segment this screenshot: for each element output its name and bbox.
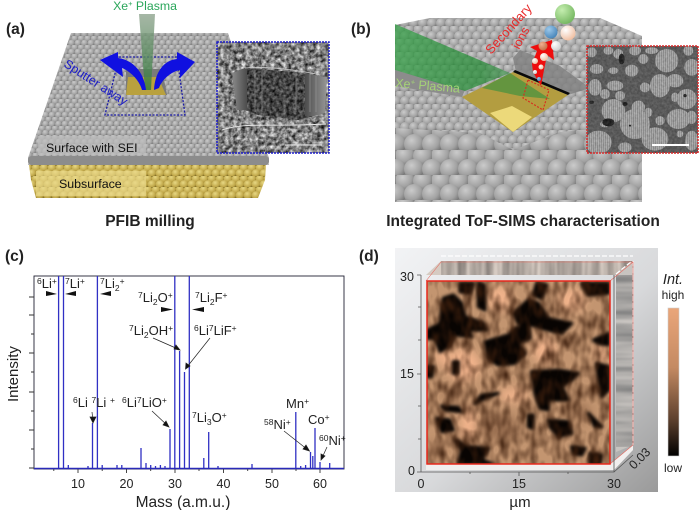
- panel b: ToF-SIMS: [351, 0, 699, 230]
- peak labels: 3: [207, 417, 212, 427]
- y labels d: 0: [408, 464, 415, 478]
- label a: (a): [6, 21, 25, 38]
- ion spheres: [532, 4, 576, 81]
- milled pit: [462, 50, 590, 132]
- surface label: Surface with SEI: [46, 141, 138, 155]
- spectrum peaks: [59, 276, 330, 468]
- mid surface: [395, 18, 642, 160]
- intensity legend: high: [662, 288, 684, 302]
- surface slab: [28, 33, 269, 165]
- peak labels: 7: [65, 276, 70, 286]
- red frame: [427, 281, 610, 464]
- x labels d: 15: [512, 477, 526, 491]
- panel d: ion map: [359, 248, 684, 510]
- black pointer triangles: [46, 291, 204, 312]
- beam on pit floor: [482, 73, 550, 99]
- peak labels: Li: [199, 323, 209, 338]
- peak labels: 2: [144, 330, 149, 340]
- milled crater: [126, 69, 167, 95]
- peak labels: +: [325, 412, 330, 422]
- peak labels: +: [120, 276, 125, 286]
- plasma label b: +: [410, 77, 416, 87]
- peak labels: Li: [200, 290, 210, 305]
- peak labels: Li: [105, 276, 115, 291]
- peak labels: 6: [122, 395, 127, 405]
- blue arrow left: [100, 52, 146, 90]
- x tick labels: 30: [168, 477, 182, 491]
- x labels d: 30: [607, 477, 621, 491]
- peak labels: OH: [149, 323, 168, 338]
- peak labels: 7: [129, 323, 134, 333]
- annotation arrows: [90, 338, 327, 460]
- peak labels: Li: [134, 323, 144, 338]
- y labels d: 30: [400, 270, 414, 284]
- peak labels: Ni: [273, 417, 286, 432]
- peak labels: Li: [96, 395, 110, 410]
- peak labels: Li: [143, 290, 153, 305]
- y labels d: 15: [400, 367, 414, 381]
- peak labels: 7: [137, 395, 142, 405]
- peak labels: [37, 276, 346, 448]
- ion beam: [139, 14, 155, 90]
- x tick labels: 40: [217, 477, 230, 491]
- panel a: PFIB milling: [6, 0, 329, 230]
- peak labels: +: [286, 417, 291, 427]
- 3D box sides: [426, 256, 633, 470]
- slab edge: [28, 156, 269, 165]
- gold subsurface block: [29, 165, 266, 198]
- subsurface label: [36, 171, 146, 196]
- secondary ions text: Secondary: [482, 0, 535, 57]
- depth label: 0.03: [626, 445, 653, 472]
- peak labels: +: [341, 433, 346, 443]
- SEM inset a: [217, 42, 329, 153]
- flat band beside beam: [395, 70, 465, 97]
- peak labels: 7: [209, 323, 214, 333]
- peak labels: +: [80, 276, 85, 286]
- grey backdrop: [395, 248, 658, 492]
- plasma label b: Plasma: [414, 78, 461, 96]
- peak labels: 6: [194, 323, 199, 333]
- red arrow: [530, 40, 554, 86]
- peak labels: 7: [91, 395, 96, 405]
- x tick labels: 20: [120, 477, 133, 491]
- plasma beam b: [395, 24, 510, 91]
- label d: (d): [359, 248, 379, 265]
- peak labels: 2: [210, 297, 215, 307]
- peak labels: Li: [70, 276, 80, 291]
- peak labels: O: [158, 290, 168, 305]
- peak labels: +: [162, 395, 167, 405]
- peak labels: 2: [115, 283, 120, 293]
- peak labels: 7: [195, 290, 200, 300]
- x tick labels: 50: [265, 477, 279, 491]
- peak labels: Li: [127, 395, 137, 410]
- x labels d: [418, 477, 621, 491]
- label c: (c): [5, 248, 24, 265]
- sputter text: Sputter away: [61, 57, 131, 109]
- peak labels: +: [168, 323, 173, 333]
- intensity legend: Int.: [663, 272, 683, 288]
- peak labels: 2: [153, 297, 158, 307]
- big spheres foreground: [395, 125, 642, 202]
- peak labels: Ni: [328, 433, 341, 448]
- peak labels: Li: [42, 276, 52, 291]
- label b: (b): [351, 21, 371, 38]
- y labels d: [400, 270, 415, 478]
- x labels d: 0: [418, 477, 425, 491]
- peak labels: +: [168, 290, 173, 300]
- peak labels: +: [110, 395, 115, 405]
- mid-brown patches: [427, 367, 608, 458]
- axes: [29, 276, 344, 473]
- x tick labels: 60: [313, 477, 327, 491]
- peak labels: LiF: [214, 323, 232, 338]
- peak labels: 6: [37, 276, 42, 286]
- plasma label b: Xe: [395, 76, 411, 91]
- peak labels: LiO: [142, 395, 162, 410]
- peak labels: 60: [319, 433, 329, 443]
- peak labels: 58: [264, 417, 274, 427]
- peak labels: 7: [192, 410, 197, 420]
- peak labels: +: [52, 276, 57, 286]
- peak labels: +: [222, 410, 227, 420]
- red analysis box: [523, 80, 549, 110]
- baseline: [34, 468, 344, 470]
- caption b: Integrated ToF-SIMS characterisation: [386, 213, 660, 230]
- heat map: [426, 280, 611, 465]
- peak labels: 7: [138, 290, 143, 300]
- peak labels: F: [215, 290, 223, 305]
- intensity legend: [662, 272, 684, 475]
- blue arrow right: [154, 52, 195, 90]
- peak labels: 7: [100, 276, 105, 286]
- peak labels: Mn: [286, 396, 304, 411]
- peak labels: +: [232, 323, 237, 333]
- y axis title: Intensity: [5, 346, 22, 402]
- peak labels: 6: [73, 395, 78, 405]
- intensity legend: low: [664, 461, 682, 475]
- peak labels: O: [212, 410, 222, 425]
- axes d: [417, 275, 633, 476]
- surface label: [38, 136, 146, 155]
- x tick labels: [71, 477, 327, 491]
- blue selection outline: [105, 57, 185, 115]
- caption a: PFIB milling: [105, 213, 195, 230]
- panel c: mass spectrum: [5, 248, 346, 510]
- ions text: ions: [509, 25, 532, 51]
- peak labels: +: [223, 290, 228, 300]
- peak labels: Co: [308, 412, 325, 427]
- subsurface label: Subsurface: [59, 177, 122, 191]
- SEM inset b: [585, 46, 699, 154]
- x tick labels: 10: [71, 477, 85, 491]
- dark areas: [427, 283, 608, 463]
- light areas: [435, 285, 608, 440]
- peak labels: Li: [78, 395, 91, 410]
- peak labels: Li: [197, 410, 207, 425]
- peak labels: +: [304, 396, 309, 406]
